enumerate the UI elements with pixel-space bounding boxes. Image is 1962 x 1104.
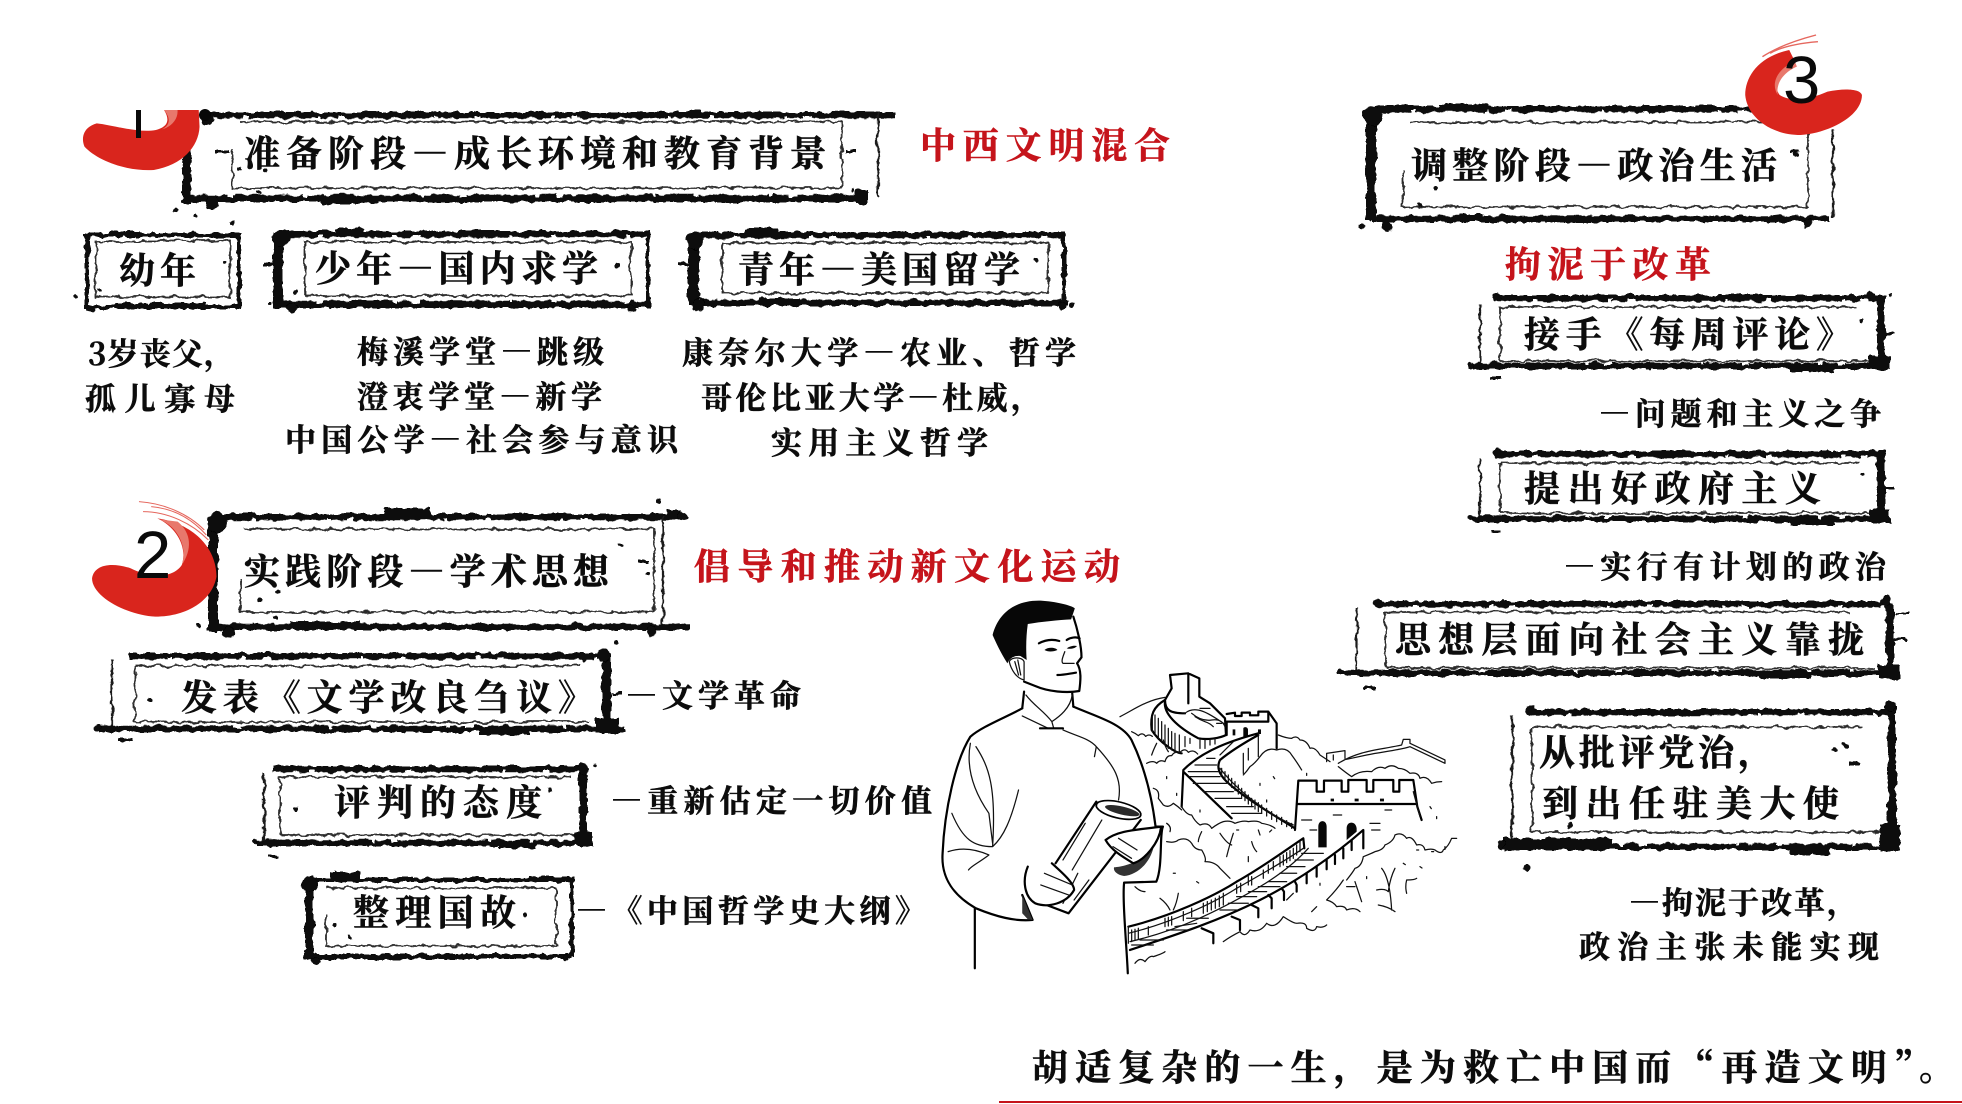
annotation: literary revolution: —文学革命 [626,671,801,716]
red subtitle: stage 3: 拘泥于改革 [1505,237,1711,288]
frame: critical attitude [253,762,597,858]
text: domestic schools [285,327,681,460]
frame: toward socialism [1337,596,1909,690]
panel: stage 2 practice [92,498,1120,965]
frame: infancy: 幼年 [119,243,196,294]
frame: young adult study in America: 青年—美国留学 [738,242,1020,293]
annotation: history of Chinese philosophy: —《中国哲学史大纲》 [576,886,926,931]
text: American study: 康奈尔大学—农业、哲学 [682,328,1076,373]
red subtitle: stage 2: 倡导和推动新文化运动 [694,539,1120,590]
frame: good government: 提出好政府主义 [1524,461,1821,512]
badge: number 2 [92,502,216,617]
frame: from criticising party rule to ambassador: 从批评党治， [1539,725,1774,776]
heading frame: stage 3 [1360,104,1833,231]
frame: reorganize national heritage [302,872,574,965]
illustration part: man [942,601,1163,973]
heading frame: stage 3: 调整阶段—政治生活 [1411,138,1777,189]
frame: reorganize national heritage: 整理国故 [353,885,516,936]
annotation: problems and isms debate: —问题和主义之争 [1599,389,1881,434]
annotation: reform unrealised: —拘泥于改革， [1629,878,1858,923]
frame: weekly review [1467,292,1895,380]
frame: youth domestic schooling [264,228,648,313]
frame: from criticising party rule to ambassador: 到出任驻美大使 [1542,776,1839,827]
text: infancy details [85,329,235,419]
panel: stage 1 preparation [74,109,1170,463]
frame: youth domestic schooling: 少年—国内求学 [315,241,598,292]
text: closing sentence: 胡适复杂的一生，是为救亡中国而“再造文明”。 [1032,1040,1955,1091]
illustration part: Great Wall [1120,673,1457,963]
text: domestic schools: 澄衷学堂—新学 [357,372,602,417]
frame: literary reform essay [95,641,625,741]
heading frame: stage 1: 准备阶段—成长环境和教育背景 [244,126,827,177]
frame: weekly review: 接手《每周评论》 [1524,307,1852,358]
red underline [999,1101,1962,1103]
heading frame: stage 2 [196,498,690,638]
badge: number 3 [1745,35,1862,135]
text: infancy details: 孤儿寡母 [85,374,235,419]
text: American study: 哥伦比亚大学—杜威， [701,373,1042,418]
text: infancy details: 3岁丧父， [88,329,235,374]
annotation: planned politics: —实行有计划的政治 [1564,542,1889,587]
frame: young adult study in America [678,228,1074,311]
red subtitle: stage 1: 中西文明混合 [920,118,1170,169]
badge: number 2: 2 [134,518,171,593]
annotation: reform unrealised: 政治主张未能实现 [1579,922,1879,967]
text: American study [682,328,1076,463]
heading frame: stage 2: 实践阶段—学术思想 [244,544,611,595]
annotation: reform unrealised [1579,878,1879,967]
frame: literary reform essay: 发表《文学改良刍议》 [181,670,594,721]
frame: critical attitude: 评判的态度 [334,775,542,826]
text: domestic schools: 中国公学—社会参与意识 [285,415,681,460]
illustration: man in changshan holding scroll with Great Wall [942,601,1457,973]
panel: stage 3 adjustment [1337,35,1909,967]
text: American study: 实用主义哲学 [771,418,988,463]
badge: number 3: 3 [1783,43,1820,118]
heading frame: stage 1 [174,110,895,217]
text: domestic schools: 梅溪学堂—跳级 [357,327,604,372]
frame: from criticising party rule to ambassador [1497,701,1900,872]
frame: infancy [74,220,239,313]
frame: good government [1467,448,1895,533]
badge: number 1 [83,109,211,170]
annotation: revalue all values: —重新估定一切价值 [611,776,932,821]
frame: toward socialism: 思想层面向社会主义靠拢 [1395,612,1864,663]
